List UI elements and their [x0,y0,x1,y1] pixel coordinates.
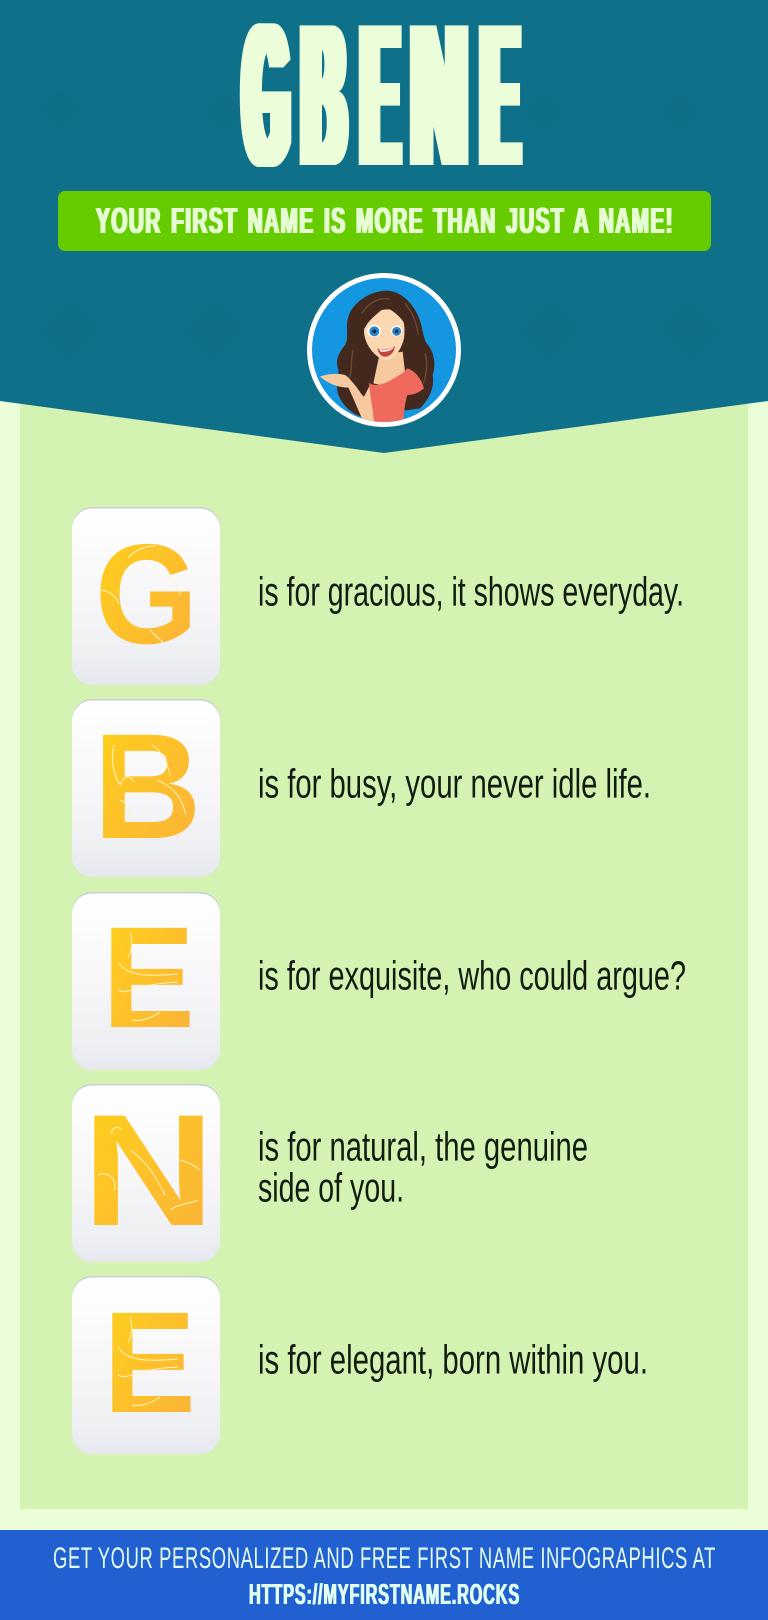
row 5: letter E [72,1276,648,1454]
text: N meaning: side of you. [258,1164,404,1210]
letter card E: E [103,1282,196,1443]
footer url: HTTPS://MYFIRSTNAME.ROCKS [249,1579,520,1611]
letter card N: N [82,1081,215,1259]
neck [373,352,405,386]
mouth [377,346,395,357]
subtitle banner [58,191,711,251]
text: N meaning [258,1124,588,1210]
letter card E [72,892,220,1070]
letter card G: G [95,515,198,674]
eyes [367,325,381,337]
hair fringe [363,299,405,328]
footer [0,1530,768,1620]
title [244,0,518,209]
arm [320,374,375,423]
letter card B: B [93,702,202,870]
row 3: letter E [72,892,686,1070]
letter card E: E [102,897,195,1058]
letter card B [72,699,220,877]
hair [337,291,434,417]
text: N meaning: is for natural, the genuine [258,1124,588,1170]
panel: content area [20,390,748,1509]
face [364,309,404,360]
header banner [0,0,768,453]
row 1: letter G [72,507,684,685]
row 4: letter N [72,1081,588,1262]
row 2: letter B [72,699,651,877]
shirt [369,368,424,423]
avatar: woman in a circle [310,276,458,424]
letter card G [72,507,220,685]
letter card E [72,1276,220,1454]
